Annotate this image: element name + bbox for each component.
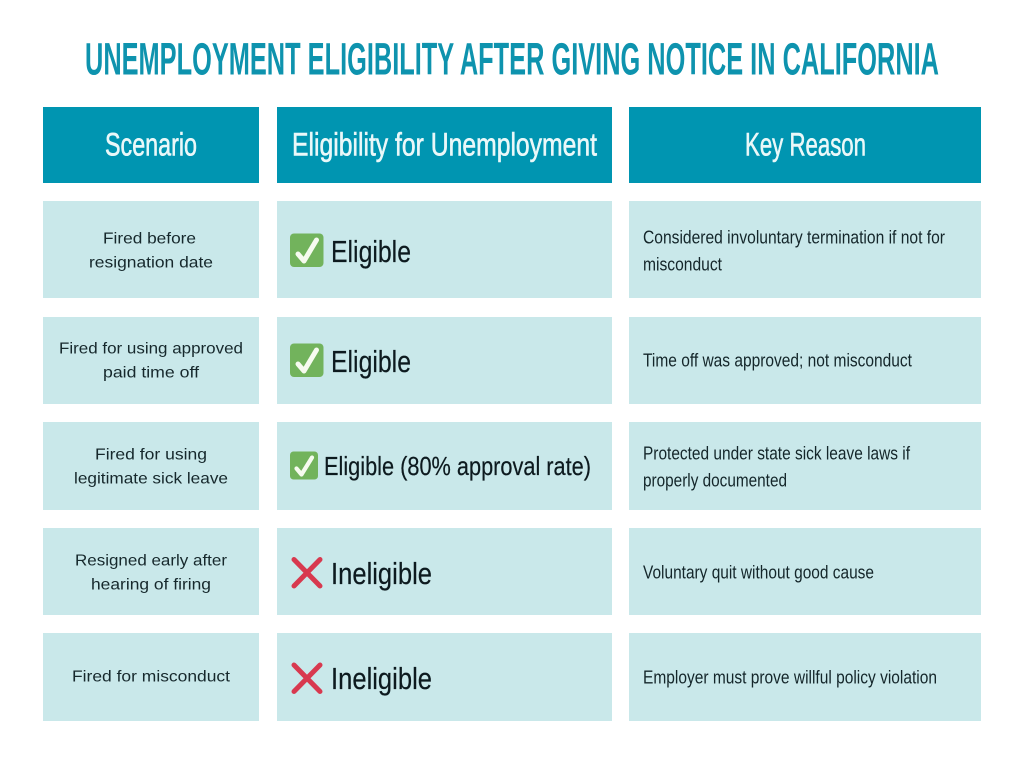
row 1: eligibility <box>277 201 612 298</box>
icon: red cross <box>294 665 320 692</box>
row 3: scenario <box>43 422 259 510</box>
row 3: scenario: legitimate sick leave <box>74 470 228 488</box>
row 5: eligibility <box>277 633 612 721</box>
row 5: scenario: Fired for misconduct <box>72 668 231 686</box>
row 3: key reason <box>629 422 981 510</box>
header: key reason <box>629 107 981 183</box>
row 1: scenario <box>43 201 259 298</box>
row 3: eligibility: Eligible (80% approval rate) <box>324 451 591 481</box>
row 5: key reason: Employer must prove willful policy violation <box>643 668 937 688</box>
header: eligibility for unemployment: Eligibility for Unemployment <box>292 126 597 162</box>
header: scenario <box>43 107 259 183</box>
row 2: key reason <box>629 317 981 404</box>
row 5: eligibility: Ineligible <box>331 661 432 696</box>
row 3: key reason: Protected under state sick leave laws if <box>643 444 911 464</box>
row 4: scenario: Resigned early after <box>75 552 228 570</box>
icon: red cross <box>294 560 320 586</box>
header: key reason: Key Reason <box>745 126 866 162</box>
row 1: key reason: misconduct <box>643 254 722 274</box>
row 2: eligibility: Eligible <box>331 344 411 379</box>
row 5: scenario <box>43 633 259 721</box>
row 4: scenario <box>43 528 259 615</box>
row 2: key reason: Time off was approved; not misconduct <box>643 350 912 370</box>
row 2: scenario: Fired for using approved <box>59 340 243 358</box>
icon: green check <box>290 344 324 377</box>
row 5: key reason <box>629 633 981 721</box>
row 1: scenario: resignation date <box>89 254 213 272</box>
header: scenario: Scenario <box>105 126 197 162</box>
row 2: scenario <box>43 317 259 404</box>
icon: green check <box>290 234 324 267</box>
icon: green check <box>290 452 318 480</box>
row 4: eligibility: Ineligible <box>331 556 432 591</box>
header: eligibility for unemployment <box>277 107 612 183</box>
row 2: scenario: paid time off <box>103 364 200 382</box>
row 1: scenario: Fired before <box>103 230 196 248</box>
row 4: eligibility <box>277 528 612 615</box>
row 1: key reason <box>629 201 981 298</box>
row 4: scenario: hearing of firing <box>91 576 211 594</box>
row 3: eligibility <box>277 422 612 510</box>
row 3: key reason: properly documented <box>643 470 787 490</box>
row 1: key reason: Considered involuntary termination if not for <box>643 228 945 248</box>
row 4: key reason: Voluntary quit without good cause <box>643 562 874 582</box>
row 2: eligibility <box>277 317 612 404</box>
row 1: eligibility: Eligible <box>331 234 411 269</box>
row 4: key reason <box>629 528 981 615</box>
row 3: scenario: Fired for using <box>95 446 207 464</box>
